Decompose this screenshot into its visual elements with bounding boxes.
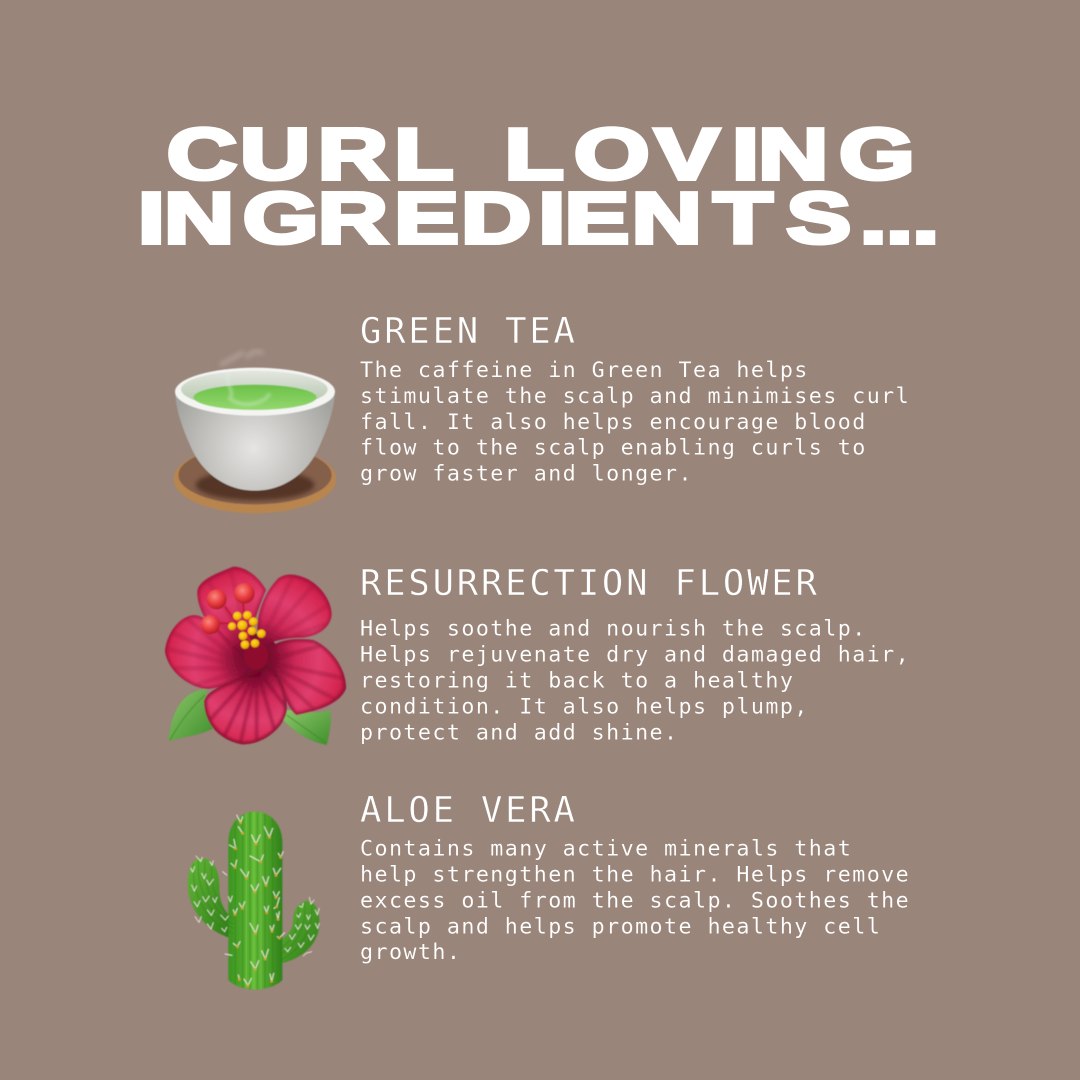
text block: green tea: stimulate the scalp and minimises curl xyxy=(360,384,910,409)
icon: green tea cup xyxy=(174,352,336,513)
title: CURL LOVING xyxy=(167,115,915,195)
text block: aloe vera: scalp and helps promote healthy cell xyxy=(360,914,881,939)
text block: resurrection flower: condition. It also helps plump, xyxy=(360,694,809,719)
heading: resurrection flower: RESURRECTION FLOWER xyxy=(360,563,820,604)
icon: cactus xyxy=(188,812,319,993)
text block: green tea: flow to the scalp enabling curls to xyxy=(360,436,867,461)
text block: aloe vera: excess oil from the scalp. Soothes the xyxy=(360,888,910,913)
text block: green tea: grow faster and longer. xyxy=(360,462,693,487)
text block: resurrection flower xyxy=(360,617,910,745)
text block: green tea: The caffeine in Green Tea helps xyxy=(360,358,809,383)
text block: green tea xyxy=(360,358,910,487)
title xyxy=(138,115,939,259)
heading: green tea: GREEN TEA xyxy=(360,311,578,352)
text block: resurrection flower: Helps soothe and nourish the scalp. xyxy=(360,617,867,642)
text block: aloe vera: help strengthen the hair. Helps remove xyxy=(360,862,910,888)
icon: hibiscus flower xyxy=(165,567,346,745)
text block: aloe vera xyxy=(360,837,910,965)
text block: resurrection flower: protect and add shine. xyxy=(360,720,678,745)
heading: aloe vera: ALOE VERA xyxy=(360,790,578,831)
title: INGREDIENTS... xyxy=(138,179,939,259)
text block: green tea: fall. It also helps encourage blood xyxy=(360,410,867,435)
text block: resurrection flower: Helps rejuvenate dry and damaged hair, xyxy=(360,643,910,668)
text block: aloe vera: Contains many active minerals that xyxy=(360,837,852,862)
text block: aloe vera: growth. xyxy=(360,940,461,965)
text block: resurrection flower: restoring it back to a healthy xyxy=(360,668,794,694)
